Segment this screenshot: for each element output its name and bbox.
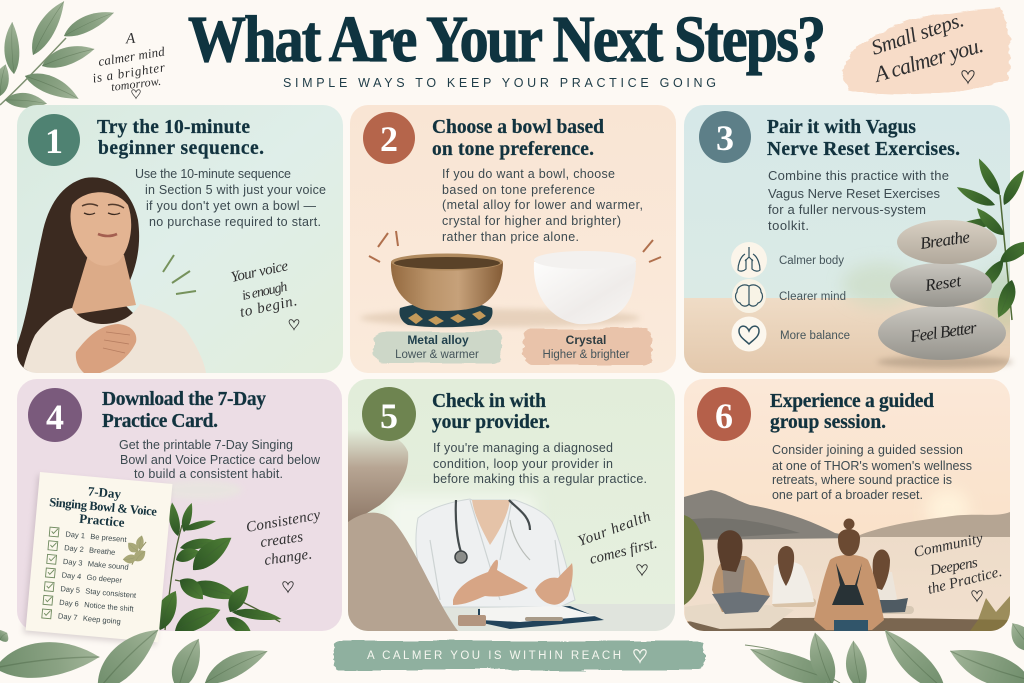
sitter: left (712, 530, 770, 614)
checklist: Day 6 (59, 598, 79, 609)
body text 1: no purchase required to start. (149, 215, 321, 229)
panel 5 background (348, 379, 675, 631)
bottom left leaves (0, 617, 271, 683)
sitter: middle (772, 546, 816, 607)
body text 6: at one of THOR's women's wellness (772, 459, 972, 473)
printable practice card (23, 472, 172, 645)
icon: brain (732, 279, 766, 313)
heading 6 (770, 391, 934, 433)
body text 2: crystal for higher and brighter) (442, 214, 621, 228)
body text 3: Combine this practice with the (768, 168, 949, 183)
top-left leaf branch (0, 0, 117, 110)
number badge 1 (28, 114, 80, 166)
heading 6: Experience a guided (770, 391, 934, 412)
panel 1 background (17, 105, 343, 373)
shadow on table (360, 309, 640, 327)
heading 4 (102, 389, 266, 432)
note: community: Deepens (928, 555, 979, 579)
subtitle: SIMPLE WAYS TO KEEP YOUR PRACTICE GOING (283, 76, 716, 90)
number badge 4: 4 (46, 397, 64, 437)
panel 5: provider (348, 379, 675, 631)
body text 3: Vagus Nerve Reset Exercises (768, 186, 940, 201)
number badge 6 (697, 387, 751, 441)
label: crystal (523, 329, 652, 365)
body text 4: to build a consistent habit. (134, 467, 283, 481)
stacked stones: Breathe (919, 227, 972, 253)
heading 5: your provider. (432, 412, 550, 433)
checklist: Be present (90, 532, 128, 544)
plant (953, 156, 1024, 321)
handwritten note: calmer mind: tomorrow. (110, 74, 162, 94)
note: consistency (245, 507, 322, 592)
panel 3: vagus nerve (684, 105, 1024, 373)
body text 5: before making this a regular practice. (433, 472, 647, 486)
body text 4: Get the printable 7-Day Singing (119, 438, 293, 452)
body text 6: Consider joining a guided session (772, 443, 963, 457)
leafy sprig (159, 502, 282, 631)
body text 2: If you do want a bowl, choose (442, 167, 615, 181)
heading 2: on tone preference. (432, 139, 594, 160)
checklist: Keep going (83, 614, 121, 626)
tabletop scene (684, 263, 1024, 373)
checklist: Day 3 (63, 557, 83, 568)
body text 6 (772, 443, 972, 502)
checklist: Day 7 (58, 611, 78, 622)
body text 1 (135, 167, 326, 229)
checklist: Breathe (89, 545, 116, 557)
sound accent lines (163, 255, 196, 294)
label: metal alloy: Metal alloy (407, 333, 469, 347)
checklist (42, 527, 142, 627)
panel 3 background (684, 105, 1010, 373)
handwritten note: calmer mind: A (124, 31, 136, 47)
body text 2: based on tone preference (442, 183, 595, 197)
note: your voice: is enough (241, 280, 289, 304)
stacked stones (877, 220, 1013, 368)
number badge 3 (699, 111, 751, 163)
heading 2: Choose a bowl based (432, 117, 604, 138)
checklist: Day 5 (60, 584, 80, 595)
body text 3 (768, 168, 949, 233)
cushions (685, 603, 794, 629)
bottom right leaves (745, 618, 1024, 683)
body text 1: in Section 5 with just your voice (145, 183, 326, 197)
icon: metal bowl sound lines (369, 231, 398, 262)
heading 4: Practice Card. (102, 411, 218, 432)
stacked stones: Reset (923, 271, 963, 295)
checklist: Stay consistent (85, 586, 137, 600)
panel 2: bowl tone (350, 105, 676, 373)
title: What Are Your Next Steps? (188, 4, 826, 76)
heading 6: group session. (770, 412, 886, 433)
checklist: Make sound (87, 559, 129, 572)
body text 6: retreats, where sound practice is (772, 473, 952, 487)
note: your voice (230, 258, 299, 330)
number badge 6: 6 (715, 396, 733, 436)
heading 4: Download the 7-Day (102, 389, 266, 410)
body text 3: toolkit. (768, 218, 809, 233)
note: your health: Your health (576, 509, 653, 550)
note: your voice: to begin. (239, 293, 299, 321)
body text 1: Use the 10-minute sequence (135, 167, 291, 181)
note: consistency: change. (263, 546, 313, 569)
label: crystal: Higher & brighter (543, 349, 630, 361)
note: consistency: creates (259, 529, 304, 551)
panel 6 background (684, 379, 1010, 631)
number badge 5 (362, 387, 416, 441)
number badge 2: 2 (380, 119, 398, 159)
callout: small steps: A calmer you. (870, 32, 986, 87)
icon: lungs (731, 242, 767, 278)
printable practice card: Singing Bowl & Voice (49, 495, 158, 519)
label: crystal: Crystal (566, 333, 606, 347)
sitter: foreground (814, 518, 884, 632)
sitter: far right (872, 550, 914, 614)
checklist: Day 1 (65, 530, 85, 540)
handwritten note: calmer mind: calmer mind (97, 44, 166, 69)
label: metal alloy (373, 331, 501, 363)
bottom banner (334, 641, 704, 670)
number badge 4 (28, 388, 82, 442)
panel 4: practice card (17, 379, 342, 645)
label: metal alloy: Lower & warmer (395, 349, 479, 361)
note: community (913, 531, 1004, 601)
handwritten note: calmer mind: is a brighter (91, 59, 167, 86)
panel 2 background (350, 105, 676, 373)
printable practice card: Practice (79, 511, 125, 530)
heading 3 (767, 117, 960, 160)
number badge 3: 3 (716, 118, 734, 158)
retreat meditation scene (684, 488, 1010, 632)
checklist: Notice the shift (84, 600, 135, 614)
checklist: Go deeper (86, 573, 123, 585)
note: your health: comes first. (588, 536, 659, 568)
illustration: woman breathing (17, 177, 206, 373)
callout: small steps: Small steps. (868, 7, 967, 60)
body text 5: condition, loop your provider in (433, 457, 613, 471)
heading 1: Try the 10-minute (97, 117, 250, 138)
icon: metal singing bowl (391, 254, 503, 327)
label: more balance: More balance (780, 330, 850, 342)
heading 3: Nerve Reset Exercises. (767, 139, 960, 160)
body text 5 (433, 441, 647, 486)
doctor consultation scene (348, 429, 675, 631)
note: your voice: Your voice (230, 258, 290, 286)
note: consistency: Consistency (245, 507, 322, 536)
icon: crystal bowl (534, 251, 636, 324)
stacked stones: Feel Better (908, 318, 978, 346)
panel 4 background (17, 379, 342, 631)
checklist: Day 2 (64, 543, 84, 554)
heading 5: Check in with (432, 391, 546, 412)
callout: small steps (844, 7, 1010, 95)
small sprig on card (122, 534, 150, 567)
panel 6: group session (684, 379, 1010, 632)
bottom banner: A CALMER YOU IS WITHIN REACH (367, 650, 621, 662)
label: clearer mind: Clearer mind (779, 291, 846, 303)
body text 6: one part of a broader reset. (772, 488, 923, 502)
handwritten note: calmer mind (91, 31, 167, 98)
number badge 5: 5 (380, 396, 398, 436)
icon: crystal bowl sound lines (643, 240, 661, 262)
heading 1: beginner sequence. (98, 138, 264, 159)
body text 1: if you don't yet own a bowl — (146, 199, 316, 213)
note: community: the Practice. (926, 564, 1004, 598)
body text 4: Bowl and Voice Practice card below (120, 453, 321, 467)
heading 1 (97, 117, 264, 159)
label: calmer body: Calmer body (779, 255, 844, 267)
panel 1: beginner sequence (17, 105, 343, 373)
body text 3: for a fuller nervous-system (768, 202, 926, 217)
icon: heart (732, 316, 766, 352)
number badge 1: 1 (45, 121, 63, 161)
printable practice card: 7-Day (87, 483, 122, 501)
body text 2 (442, 167, 643, 244)
body text 4 (119, 438, 321, 481)
body text 2: (metal alloy for lower and warmer, (442, 198, 643, 212)
heading 5 (432, 391, 550, 433)
heading 2 (432, 117, 604, 160)
body text 2: rather than price alone. (442, 230, 579, 244)
number badge 2 (363, 112, 415, 164)
note: your health (576, 509, 659, 575)
note: community: Community (913, 531, 985, 561)
body text 5: If you're managing a diagnosed (433, 441, 613, 455)
heading 3: Pair it with Vagus (767, 117, 916, 138)
checklist: Day 4 (61, 570, 82, 581)
